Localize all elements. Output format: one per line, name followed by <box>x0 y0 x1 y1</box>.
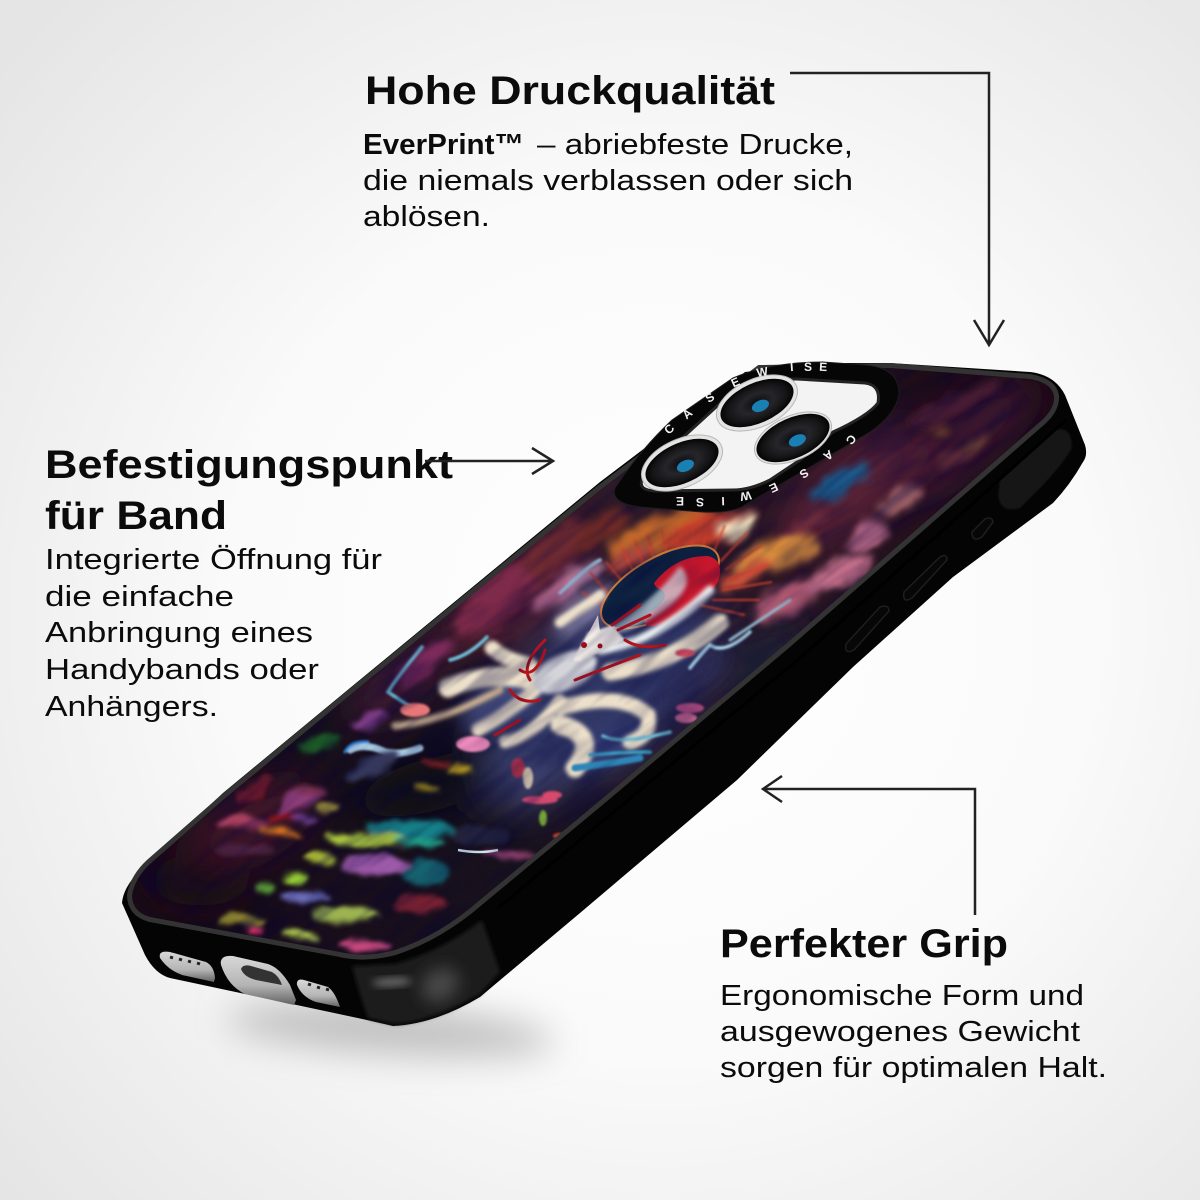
brand lettering on island: W <box>738 488 752 504</box>
arrow <box>763 776 975 915</box>
brand lettering on island: E <box>767 480 780 496</box>
brand lettering on island: E <box>729 374 742 390</box>
brand lettering on island: A <box>820 447 836 464</box>
artwork: lower garden colours <box>214 708 535 951</box>
heading <box>45 443 453 538</box>
brand lettering on island: S <box>703 390 717 406</box>
case side ridge <box>498 420 1066 908</box>
artwork: yin-yang sun disc <box>600 544 720 635</box>
artwork: fox figure <box>495 605 665 735</box>
body text: Integrierte Öffnung für <box>45 544 382 576</box>
artwork: blue wisps <box>345 560 790 768</box>
side switch <box>998 429 1072 509</box>
body text <box>363 129 853 233</box>
brand lettering on island <box>661 360 859 509</box>
lens 2 <box>747 401 839 475</box>
usb port <box>221 956 296 1005</box>
drop shadow under phone <box>224 995 556 1065</box>
artwork: pink blossom clouds <box>391 376 1004 693</box>
body text: ausgewogenes Gewicht <box>720 1016 1080 1048</box>
body text: sorgen für optimalen Halt. <box>720 1052 1107 1084</box>
phone case <box>122 362 1086 1028</box>
heading: Hohe Druckqualität <box>365 69 775 113</box>
right speaker grille <box>297 980 340 1007</box>
body text: – abriebfeste Drucke, <box>537 129 853 161</box>
brand lettering on island: I <box>790 360 794 374</box>
case body silhouette <box>122 363 1086 1026</box>
brand lettering on island: S <box>696 495 704 509</box>
brand lettering on island: C <box>843 432 859 448</box>
arrow <box>790 73 1004 345</box>
bottom corner highlight <box>352 920 500 1024</box>
brand lettering on island: C <box>661 421 677 437</box>
body text: EverPrint™ <box>363 129 524 161</box>
heading: Befestigungspunkt <box>45 443 453 487</box>
body text: Ergonomische Form und <box>720 980 1084 1012</box>
body text: Anhängers. <box>45 691 218 723</box>
heading: Perfekter Grip <box>720 922 1008 966</box>
brand lettering on island: A <box>680 406 696 422</box>
callout: print quality <box>363 69 1004 345</box>
brand lettering on island: W <box>756 364 770 380</box>
artwork: red coral rays <box>582 522 772 615</box>
body text: die einfache <box>45 581 234 613</box>
printed artwork <box>132 368 1054 955</box>
glass bezel rim <box>132 368 1054 955</box>
brand lettering on island: E <box>676 494 684 508</box>
artwork: lighter fog around fox <box>449 573 735 775</box>
island frame <box>614 362 899 512</box>
artwork: fox tails <box>395 590 720 768</box>
left speaker grille <box>160 952 215 982</box>
brand lettering on island: I <box>721 494 725 508</box>
artwork: painterly texture <box>138 374 1019 952</box>
artwork: white reflection line <box>458 850 498 852</box>
callout: strap attachment <box>45 443 553 723</box>
island inner plate <box>641 379 878 491</box>
lens 3 <box>633 424 731 502</box>
camera island <box>614 360 899 512</box>
body text <box>45 544 382 723</box>
side buttons <box>846 518 993 652</box>
heading: für Band <box>45 494 227 538</box>
body text: ablösen. <box>363 201 490 233</box>
body text: die niemals verblassen oder sich <box>363 165 853 197</box>
body text: Anbringung eines <box>45 617 313 649</box>
brand lettering on island: S <box>804 360 812 374</box>
artwork: pink flowers <box>400 649 704 839</box>
charging ports <box>160 952 340 1007</box>
brand lettering on island: E <box>819 360 828 374</box>
artwork: fiery sun flames <box>602 498 823 597</box>
callout: perfect grip <box>720 776 1107 1084</box>
body text: Handybands oder <box>45 654 319 686</box>
artwork: nebula clouds <box>175 376 1040 883</box>
arrow <box>425 448 553 474</box>
body text <box>720 980 1107 1084</box>
lens 1 <box>708 364 806 442</box>
brand lettering on island: S <box>797 465 811 481</box>
